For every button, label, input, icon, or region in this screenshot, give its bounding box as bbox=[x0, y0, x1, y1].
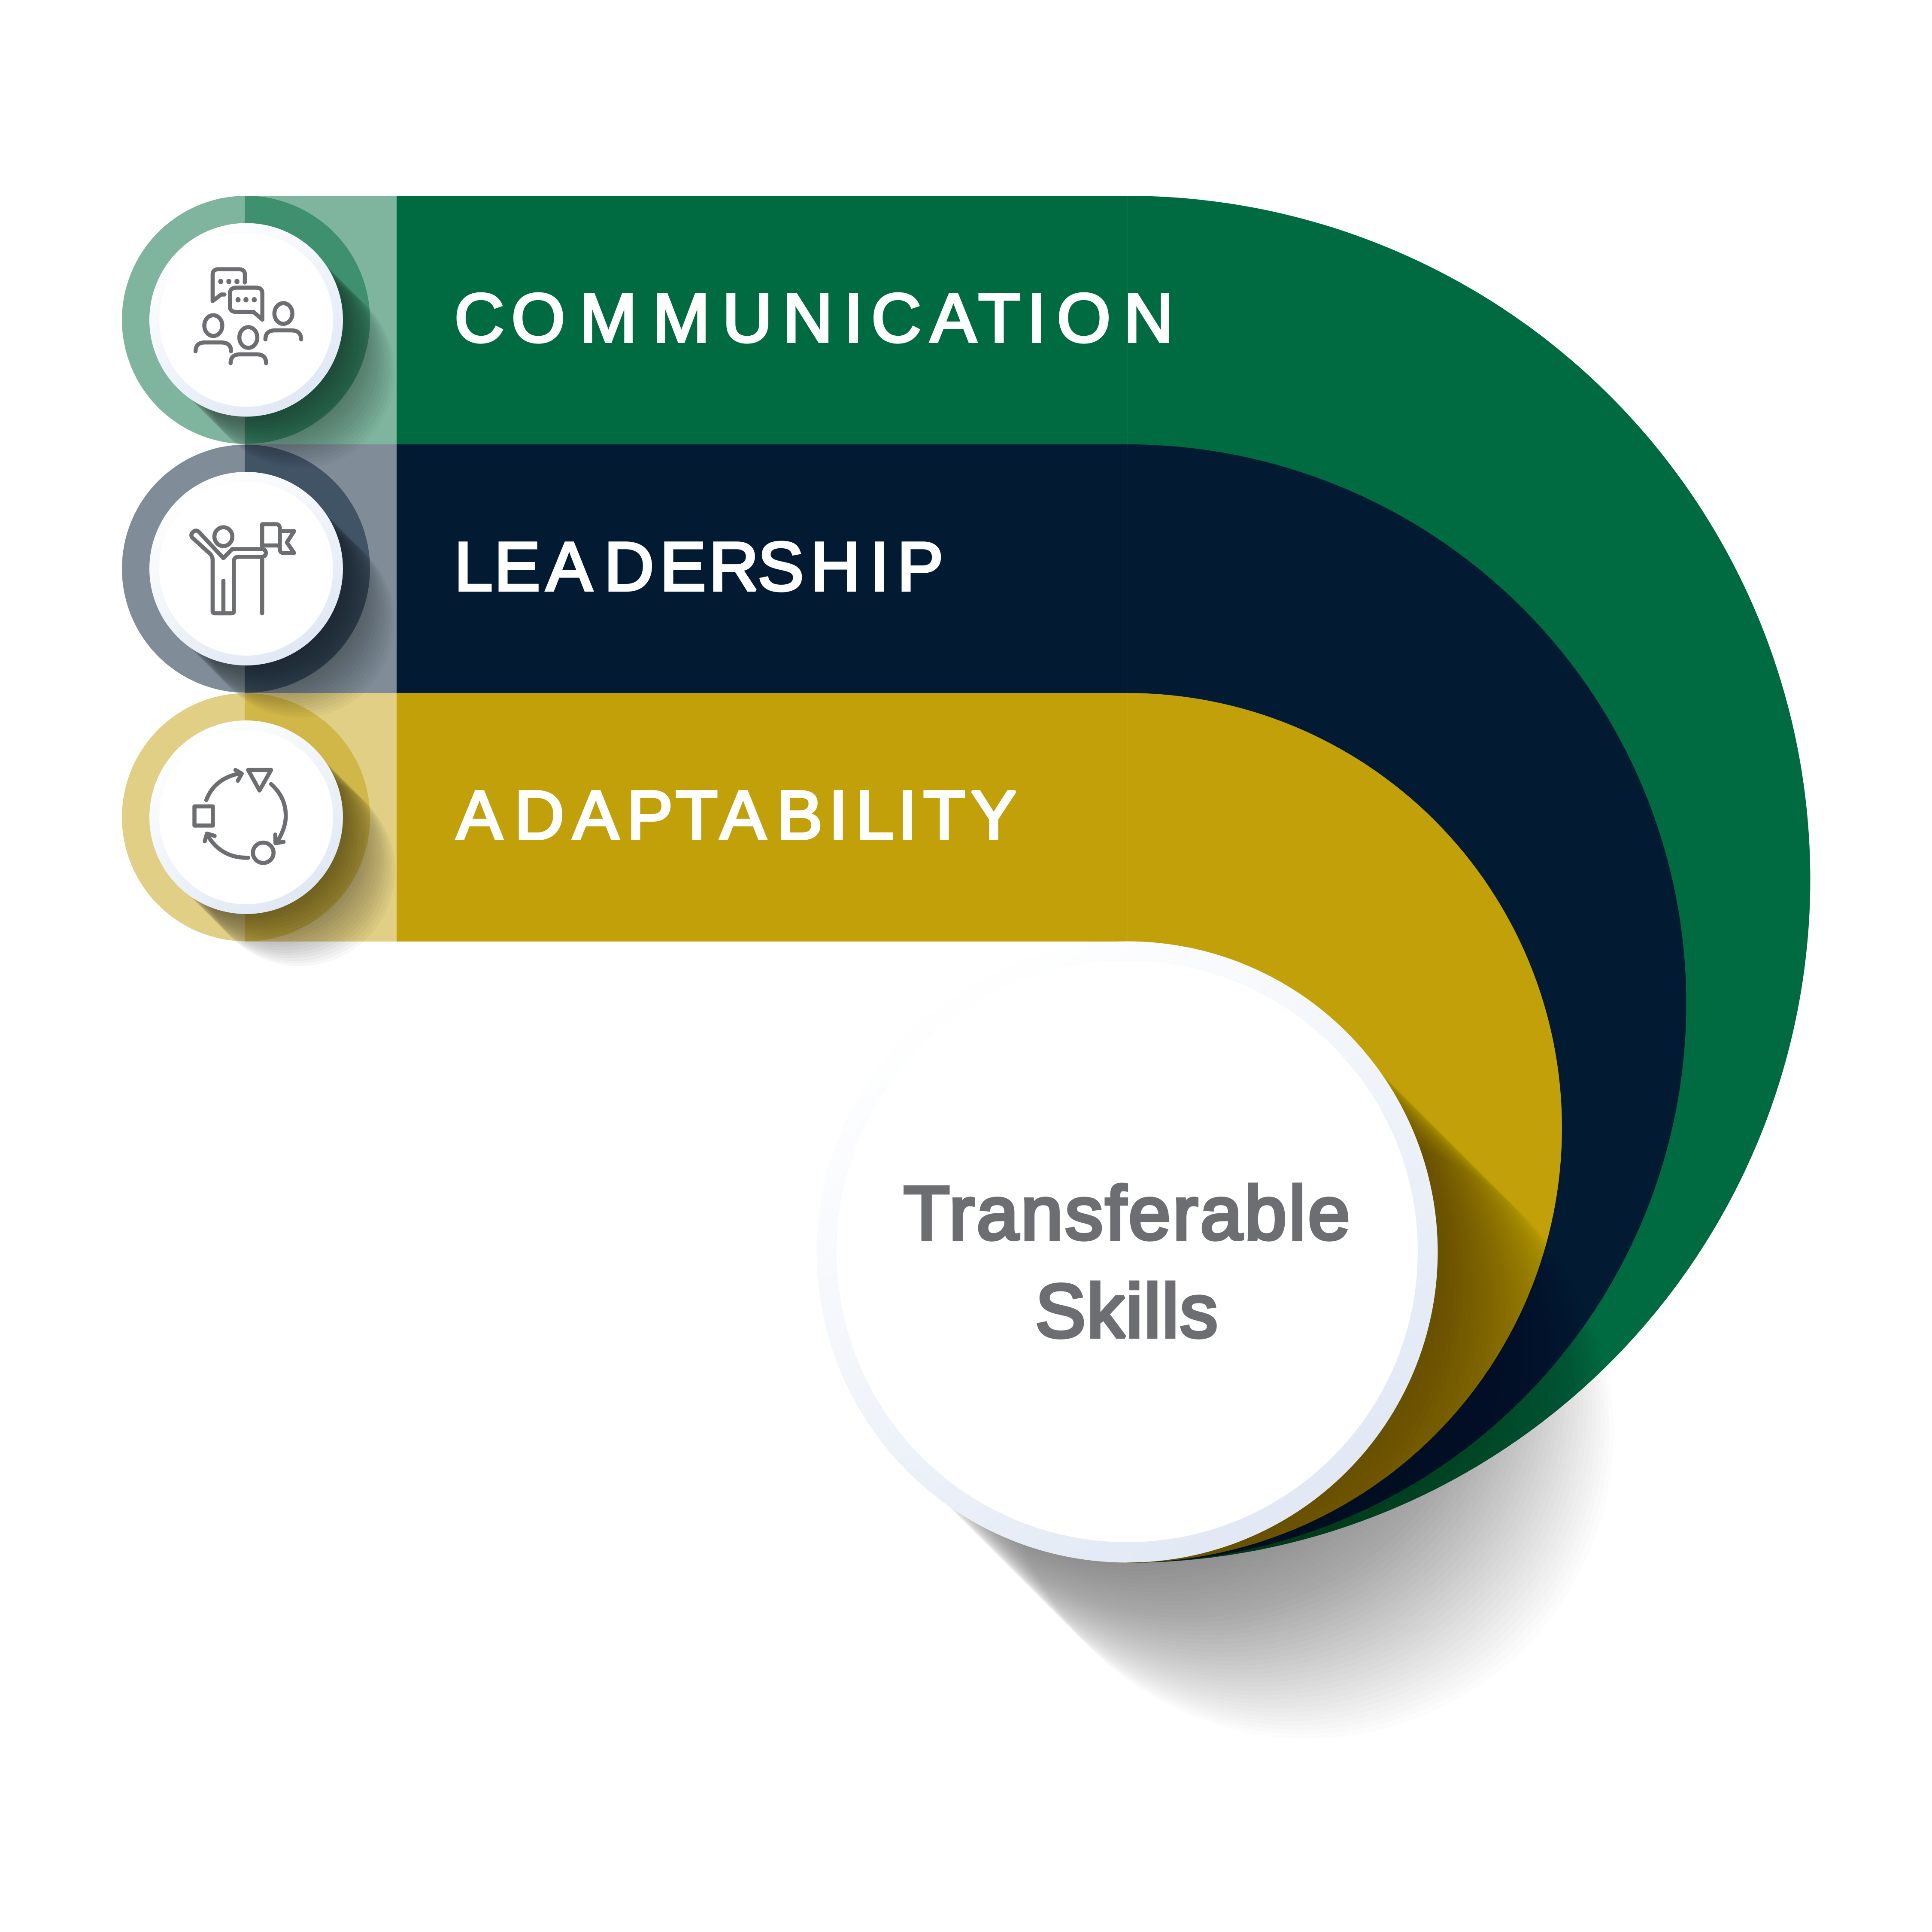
icon badge: leadership bbox=[149, 472, 343, 665]
band: adaptability (gold) bbox=[397, 693, 1562, 1563]
tabs: pale end caps of the three bands bbox=[122, 196, 397, 942]
central circle: transferable skills bbox=[816, 941, 1438, 1563]
label: communication: COMMUNICATION bbox=[454, 279, 1174, 357]
long shadows of icon circles bbox=[153, 227, 395, 966]
label: leadership: LEADERSHIP bbox=[454, 528, 943, 605]
circle face bbox=[837, 961, 1418, 1542]
icon: person with flag bbox=[191, 524, 294, 614]
long shadow of central circle bbox=[825, 950, 1614, 1738]
icon: people talking bbox=[196, 269, 301, 363]
tab: green bbox=[122, 196, 397, 444]
circle rim bbox=[816, 941, 1438, 1563]
band: leadership (navy) bbox=[397, 444, 1686, 1563]
tab: gold bbox=[122, 693, 397, 942]
icon badge: adaptability bbox=[149, 720, 343, 914]
icon badge: communication bbox=[149, 223, 343, 416]
heading: transferable skills: Skills bbox=[1035, 1269, 1218, 1353]
tab: navy bbox=[122, 444, 397, 693]
label: adaptability: ADAPTABILITY bbox=[456, 777, 1017, 854]
heading: transferable skills: Transferable bbox=[904, 1171, 1350, 1255]
icon: shapes cycling bbox=[194, 770, 286, 863]
band: communication (green) bbox=[397, 196, 1810, 1563]
heading: transferable skills bbox=[904, 1171, 1350, 1353]
